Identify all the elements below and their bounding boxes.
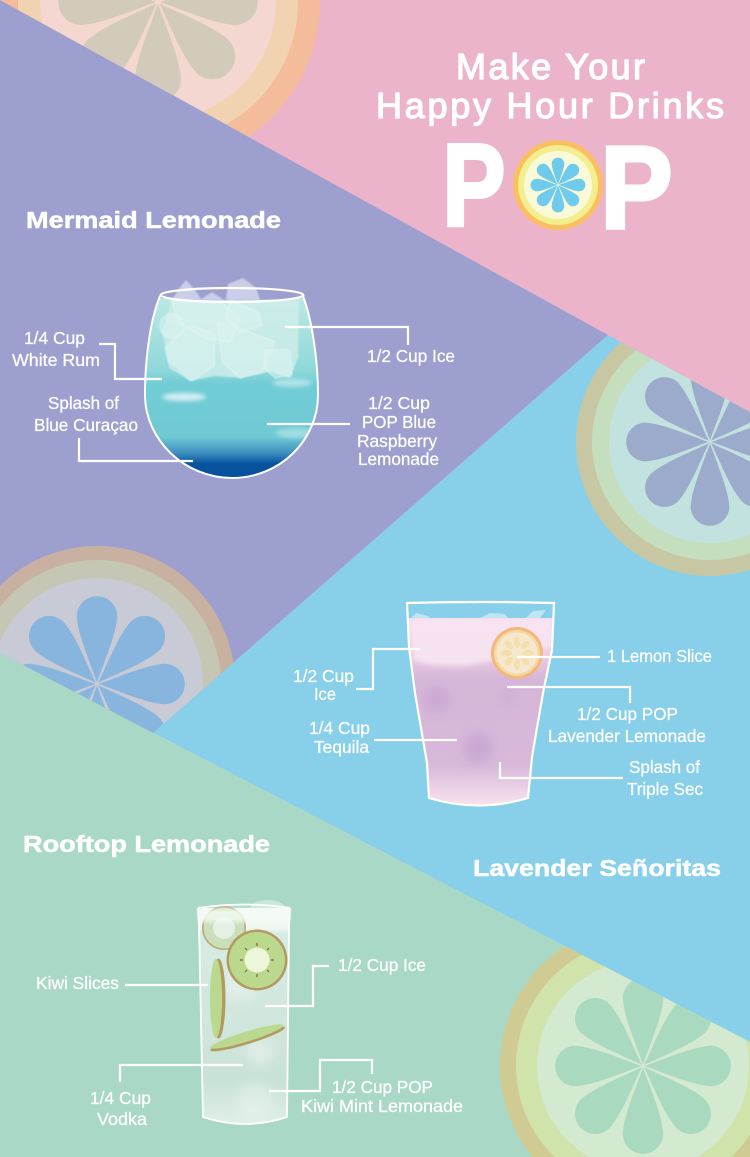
ice cloud <box>408 618 553 666</box>
liquid <box>408 618 552 804</box>
callout: Splash of Blue Curacao: Blue Curaçao <box>34 415 138 435</box>
liquid <box>145 298 318 478</box>
soft highlights <box>162 379 316 438</box>
heading: Rooftop Lemonade: Rooftop Lemonade <box>23 831 270 857</box>
callout: 1/4 Cup White Rum: White Rum <box>12 350 100 370</box>
callout: 1/2 Cup Ice: 1/2 Cup <box>293 666 354 686</box>
callout: Splash of Blue Curacao <box>34 393 193 461</box>
callout: 1/4 Cup Vodka: 1/4 Cup <box>90 1088 151 1108</box>
callout: 1/2 Cup POP Blue Raspberry Lemonade: POP Blue <box>362 412 436 432</box>
callout: 1/2 Cup Ice <box>265 955 426 1006</box>
title word: POP: P <box>600 122 672 253</box>
callout: 1/2 Cup POP Kiwi Mint Lemonade: Kiwi Mint Lemonade <box>301 1096 463 1116</box>
title word: POP <box>443 120 672 253</box>
glass outline <box>145 296 318 478</box>
icon: bottom right citrus slice <box>500 923 750 1157</box>
panel: Mermaid Lemonade purple background <box>0 0 608 733</box>
icon: kiwi slice, side view <box>210 958 226 1038</box>
callout: 1 Lemon Slice: 1 Lemon Slice <box>607 646 712 666</box>
ice above the rim <box>251 900 285 916</box>
icon: lemon slice <box>491 627 543 679</box>
glass outline <box>198 904 290 1124</box>
callout: 1/2 Cup POP Blue Raspberry Lemonade: Raspberry <box>357 431 437 451</box>
panel: Rooftop Lemonade green background <box>0 653 750 1157</box>
icon: kiwi slice <box>226 930 288 990</box>
icon: lemon slice as letter O <box>513 140 603 230</box>
drink: Rooftop Lemonade glass <box>195 900 295 1130</box>
foam <box>199 909 289 922</box>
title <box>376 46 724 253</box>
lavender shading <box>426 689 492 762</box>
callout: 1/4 Cup White Rum <box>12 328 162 379</box>
heading: Lavender Senoritas: Lavender Señoritas <box>473 855 721 881</box>
callout: 1/2 Cup POP Blue Raspberry Lemonade: 1/2 Cup <box>368 393 430 413</box>
callout: 1/2 Cup Ice: Ice <box>314 684 336 704</box>
ice above the rim <box>172 278 260 300</box>
callout: 1/2 Cup Ice: 1/2 Cup Ice <box>338 955 426 975</box>
icon: left citrus slice <box>0 546 234 733</box>
glass outline <box>407 602 554 806</box>
ice above the liquid <box>411 610 546 618</box>
callout: Splash of Triple Sec: Splash of <box>629 757 700 777</box>
icon: kiwi slice, flat view <box>208 1020 286 1055</box>
title word: POP: P <box>443 120 505 250</box>
callout: 1/2 Cup Ice <box>293 649 420 704</box>
callout: 1/2 Cup POP Blue Raspberry Lemonade: Lemonade <box>358 449 439 469</box>
heading: Mermaid Lemonade: Mermaid Lemonade <box>26 207 281 233</box>
callout: 1/4 Cup Tequila: Tequila <box>314 737 369 757</box>
callout: 1/2 Cup POP Lavender Lemonade: Lavender Lemonade <box>548 726 706 746</box>
callout: Kiwi Slices: Kiwi Slices <box>36 973 119 993</box>
callout: 1/2 Cup POP Lavender Lemonade: 1/2 Cup POP <box>577 704 678 724</box>
callout: 1/2 Cup POP Blue Raspberry Lemonade <box>267 393 439 469</box>
callout: 1/4 Cup White Rum: 1/4 Cup <box>24 328 85 348</box>
callout: 1/2 Cup Ice: 1/2 Cup Ice <box>367 346 455 366</box>
glass rim <box>160 288 304 302</box>
title: Happy Hour Drinks <box>376 85 724 126</box>
callout: 1/2 Cup Ice <box>285 327 455 366</box>
callout: 1/4 Cup Vodka <box>90 1065 243 1129</box>
callout: 1/2 Cup POP Kiwi Mint Lemonade: 1/2 Cup POP <box>332 1077 433 1097</box>
callout: 1/4 Cup Vodka: Vodka <box>97 1109 147 1129</box>
callout: 1/4 Cup Tequila <box>309 718 457 757</box>
icon: right citrus slice <box>576 342 750 576</box>
drink: Lavender Senoritas glass <box>400 602 560 813</box>
callout: Splash of Triple Sec <box>500 757 703 799</box>
drink: Mermaid Lemonade glass <box>145 278 318 478</box>
callout: Splash of Blue Curacao: Splash of <box>48 393 119 413</box>
icon: top citrus slice <box>0 0 320 136</box>
title: Make Your <box>456 46 645 87</box>
callout: 1/2 Cup POP Lavender Lemonade <box>507 687 706 746</box>
liquid <box>199 908 289 1124</box>
panel: Lavender Senoritas blue background <box>153 335 750 1042</box>
callout: 1/2 Cup POP Kiwi Mint Lemonade <box>269 1060 463 1116</box>
icon: faded kiwi slice <box>202 906 246 950</box>
callout: 1/4 Cup Tequila: 1/4 Cup <box>309 718 370 738</box>
callout: Splash of Triple Sec: Triple Sec <box>627 779 703 799</box>
ice cubes <box>160 300 316 438</box>
